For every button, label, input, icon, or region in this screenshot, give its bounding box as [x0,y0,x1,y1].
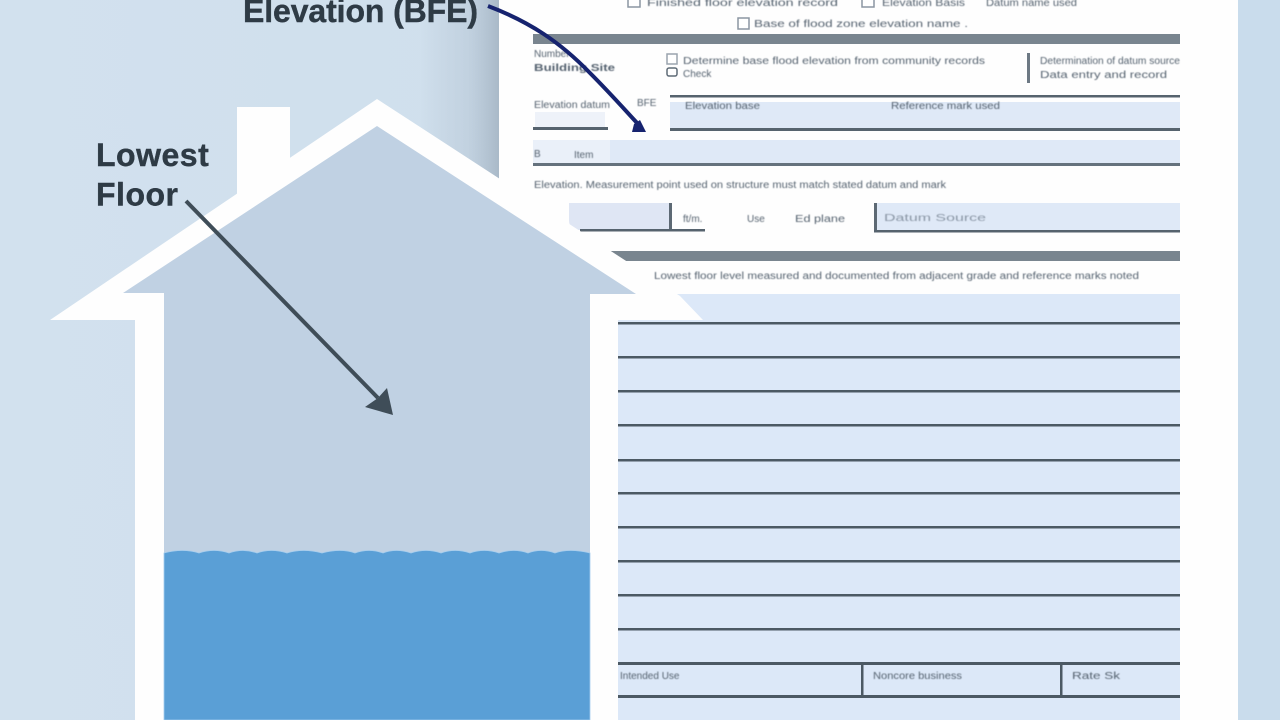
form: measurement row: Use [747,214,765,225]
form: section note: Lowest floor level measured and documented from adjacent grade and reference marks noted [654,271,1139,282]
form: section A fields: Building Site [534,63,616,74]
form: section A fields: Determine base flood elevation from community records [683,56,985,67]
form: section A fields: Check [683,69,712,80]
form: measurement row [569,203,1180,232]
arrow: BFE to form field [488,6,646,132]
label: lowest floor: Floor [96,176,178,212]
form: top checkbox row [628,0,1077,30]
panel: form document [499,0,1238,720]
house: chimney [237,107,290,197]
form: full width field: B [534,149,541,160]
form: elevation fields: BFE [637,98,657,109]
form: elevation fields: Elevation base [685,101,760,112]
form: section A fields [534,49,1180,83]
form: section A fields: Data entry and record [1040,70,1167,81]
form: section A fields: Number [534,49,570,60]
label: lowest floor: Lowest [96,137,209,173]
form: table rows: Noncore business [873,671,962,682]
form: full width field [533,140,1180,166]
form: section A fields: Determination of datum source [1040,56,1180,67]
document shadow [420,0,499,180]
arrow: lowest floor to house interior [186,201,393,415]
form: table rows: Rate Sk [1072,671,1121,682]
form: table rows [618,294,1180,720]
form: top checkbox row: Base of flood zone elevation name . [754,19,968,30]
house: interior [123,126,636,720]
house: white outline [50,99,703,720]
house: flood water [164,550,590,720]
form: measurement row: Ed plane [795,214,846,225]
form: section bar 1 [533,34,1180,44]
form: measurement row: ft/m. [683,214,702,225]
form: table rows: Intended Use [620,671,680,682]
form: elevation fields: Reference mark used [891,101,1000,112]
right margin [1238,0,1280,720]
form: section bar 2 [605,251,1180,261]
form: instruction line: Elevation. Measurement point used on structure must match stated datum and mark [534,180,947,191]
form: elevation fields: Elevation datum [534,100,610,111]
form: full width field: Item [574,150,593,161]
form: elevation fields [533,95,1180,131]
form: measurement row: Datum Source [884,213,987,224]
house [50,99,703,720]
